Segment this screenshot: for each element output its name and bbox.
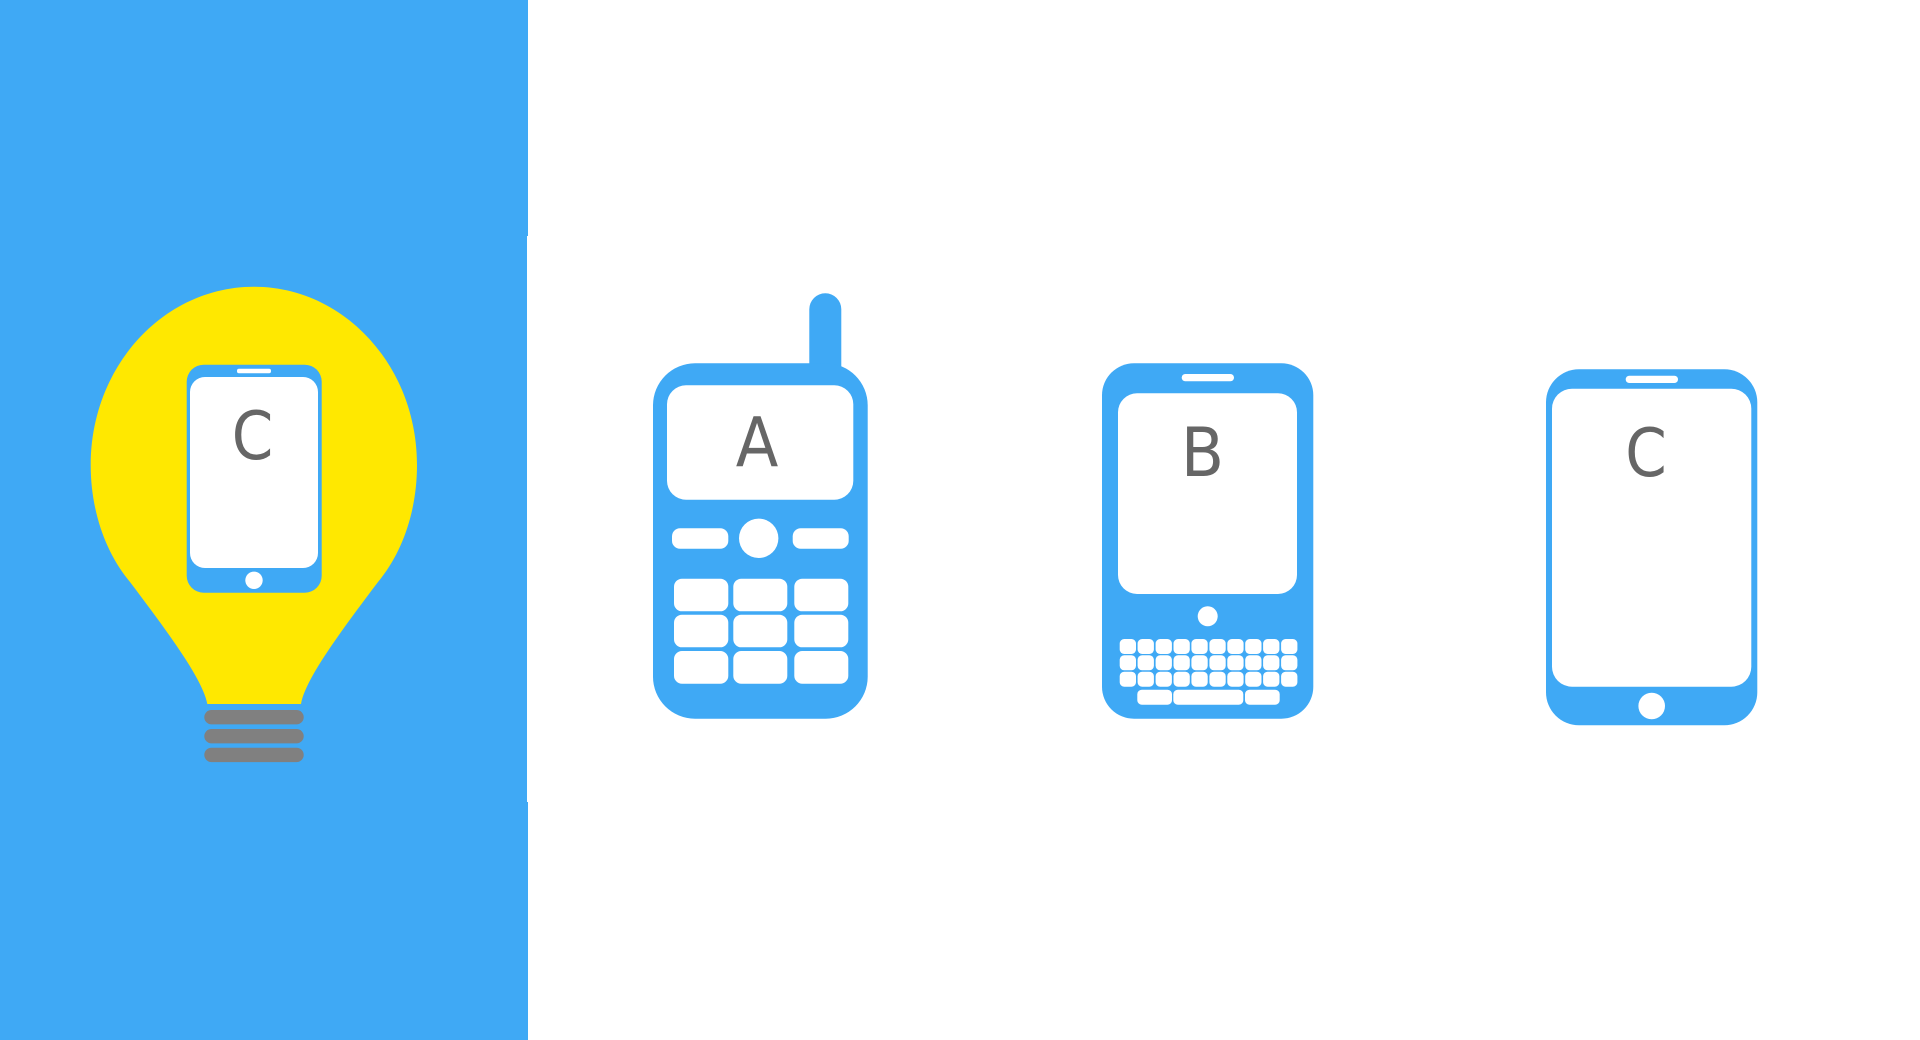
icon: phone A, feature phone with antenna [653, 293, 868, 719]
icon: light bulb with phone C [91, 287, 417, 762]
label B: B [1181, 414, 1224, 493]
navigation buttons [672, 519, 849, 558]
bulb glass [91, 287, 417, 704]
screen [667, 385, 853, 500]
speaker [1182, 374, 1234, 381]
phone body [653, 363, 868, 719]
icon: phone B, keyboard smartphone [1102, 363, 1313, 719]
label A: A [736, 403, 778, 483]
phone inside bulb [187, 365, 322, 593]
number keypad [674, 579, 848, 684]
antenna [809, 293, 841, 383]
phone inside bulb: C [232, 397, 273, 475]
screen [1118, 393, 1297, 594]
speaker [1626, 376, 1678, 383]
bulb screw base [204, 710, 304, 762]
screen [1552, 389, 1751, 687]
home button [1638, 693, 1665, 719]
phone body [1102, 363, 1313, 719]
home button [1198, 606, 1218, 626]
panel: blue sidebar [0, 0, 528, 1040]
qwerty keyboard [1120, 639, 1297, 705]
icon: phone C, full-screen smartphone [1546, 369, 1757, 725]
label C: C [1625, 414, 1667, 492]
phone body [1546, 369, 1757, 725]
